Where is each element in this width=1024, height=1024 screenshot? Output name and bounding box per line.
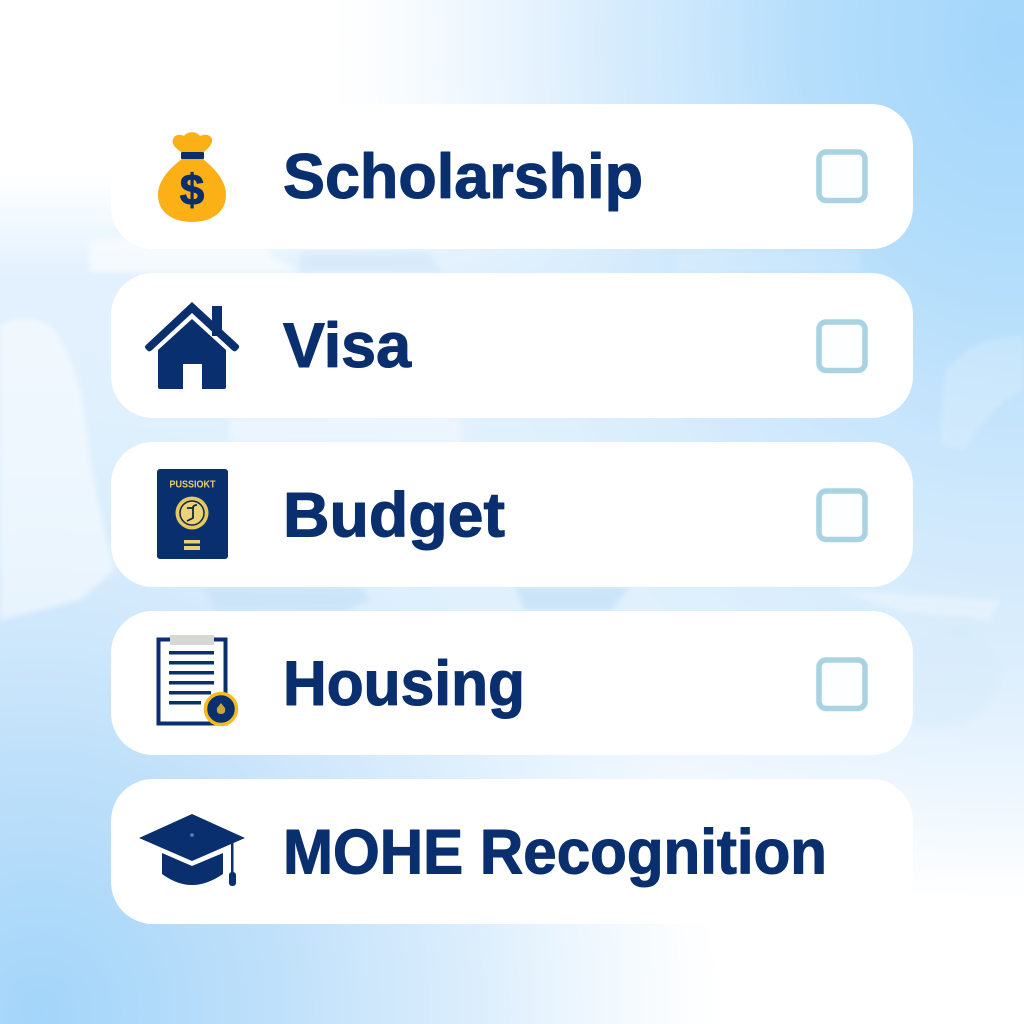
panel: budget row <box>111 442 913 587</box>
label: Scholarship: Scholarship <box>283 142 643 212</box>
passport title: PUSSIOKT <box>170 480 216 490</box>
icon: money bag <box>158 132 226 222</box>
icon: graduation cap <box>139 814 245 886</box>
checkbox <box>819 491 865 540</box>
label: Visa: Visa <box>283 311 412 381</box>
icon: passport <box>157 469 228 559</box>
checkbox <box>819 660 865 708</box>
label: Housing: Housing <box>283 649 525 719</box>
icon: house <box>145 302 239 389</box>
panel: MOHE recognition row <box>111 779 913 924</box>
checkbox <box>819 152 865 200</box>
background world map <box>0 236 1024 730</box>
panel: scholarship row <box>111 104 913 249</box>
label: MOHE Recognition: MOHE Recognition <box>283 818 827 888</box>
checkbox <box>819 322 865 370</box>
panel: housing row <box>111 611 913 755</box>
dollar sign: $ <box>180 166 204 215</box>
label: Budget: Budget <box>283 480 505 550</box>
panel: visa row <box>111 273 913 418</box>
icon: document with seal <box>158 635 236 724</box>
